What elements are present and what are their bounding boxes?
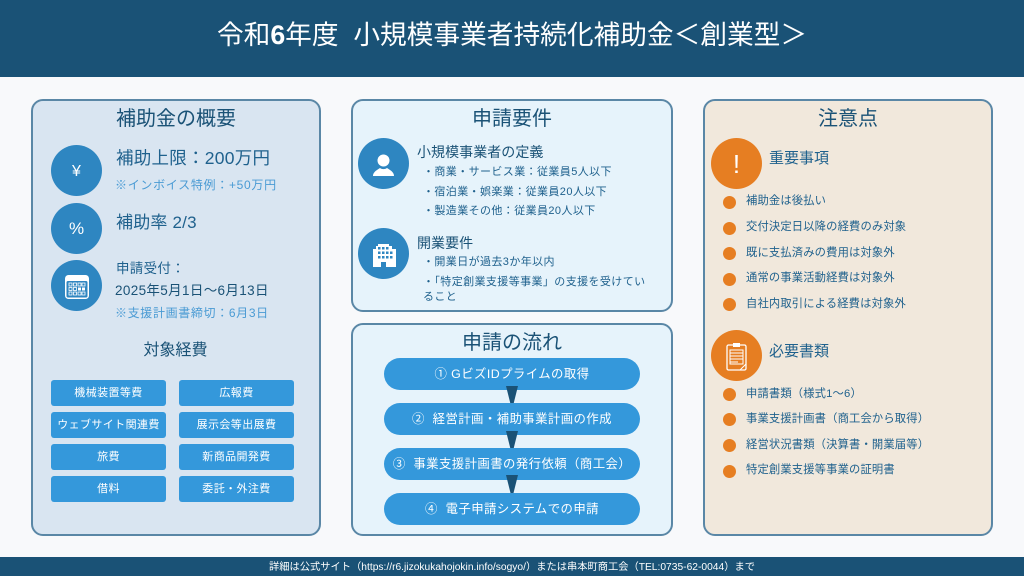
step 4: [384, 493, 640, 525]
arrow: [506, 475, 518, 493]
heading: flow: 申請の流れ: [462, 332, 562, 354]
icon: clipboard: [711, 330, 762, 381]
list item: ・宿泊業・娯楽業：従業員20人以下: [423, 186, 607, 198]
cost tag: 展示会等出展費: [197, 419, 276, 431]
icon: percent: %: [69, 218, 84, 238]
panel: cautions: [703, 99, 993, 536]
cost tag: [179, 476, 294, 502]
list item: 特定創業支援等事業の証明書: [746, 464, 895, 476]
bullet: [723, 196, 736, 209]
list item: 補助金は後払い: [746, 195, 826, 207]
bullet: [723, 222, 736, 235]
list item continuation: ること: [423, 291, 457, 303]
icon: yen: [51, 145, 102, 196]
list item: 既に支払済みの費用は対象外: [746, 247, 895, 259]
step 2: [384, 403, 640, 435]
cost tag: 広報費: [219, 387, 254, 399]
list item: 通常の事業活動経費は対象外: [746, 272, 895, 284]
cost tag: 新商品開発費: [202, 451, 271, 463]
step 2: ② 経営計画・補助事業計画の作成: [412, 412, 612, 426]
panel: application flow: [351, 323, 673, 536]
cost tag: [51, 412, 166, 438]
step 1: ① GビズIDプライムの取得: [434, 367, 590, 381]
list item: 交付決定日以降の経費のみ対象: [746, 221, 906, 233]
bullet: [723, 388, 736, 401]
list item: ・商業・サービス業：従業員5人以下: [423, 166, 612, 178]
cost tag: [179, 444, 294, 470]
step 3: [384, 448, 640, 480]
bullet: [723, 465, 736, 478]
text: opening list: [423, 256, 646, 303]
text: deadline note: ※支援計画書締切：6月3日: [115, 306, 269, 320]
panel: application requirements: [351, 99, 673, 312]
cost tag: 機械装置等費: [74, 387, 143, 399]
text: important heading: 重要事項: [769, 150, 829, 167]
text: required documents heading: 必要書類: [769, 343, 829, 360]
cost tag: [51, 476, 166, 502]
text: subsidy cap: 補助上限：200万円: [116, 148, 270, 168]
heading: cautions: 注意点: [818, 108, 878, 130]
title: 令和6年度 小規模事業者持続化補助金＜創業型＞: [217, 20, 807, 50]
footer text: 詳細は公式サイト（https://r6.jizokukahojokin.info/sogyo/）または串本町商工会（TEL:0735-62-0044）まで: [269, 562, 755, 573]
list item: 自社内取引による経費は対象外: [746, 298, 906, 310]
list item: 事業支援計画書（商工会から取得）: [746, 413, 929, 425]
list item: ・「特定創業支援等事業」の支援を受けてい: [423, 276, 646, 288]
cost tag: [51, 380, 166, 406]
footer band: [0, 557, 1024, 576]
step 3: ③ 事業支援計画書の発行依頼（商工会）: [393, 457, 631, 471]
icon: percent: [51, 202, 102, 254]
icon: calendar: [51, 260, 102, 311]
icon: exclamation: !: [733, 149, 740, 179]
list item: 経営状況書類（決算書・開業届等）: [746, 439, 929, 451]
list item: ・開業日が過去3か年以内: [423, 256, 555, 268]
list item: 申請書類（様式1～6）: [746, 388, 862, 400]
bullet: [723, 247, 736, 260]
panel: subsidy overview: [31, 99, 321, 536]
arrow: [506, 386, 518, 403]
cost tag: 委託・外注費: [202, 483, 271, 495]
grid: eligible costs: [51, 380, 294, 502]
heading: requirements: 申請要件: [472, 108, 552, 130]
text: opening requirements heading: 開業要件: [417, 234, 473, 250]
heading: overview: 補助金の概要: [116, 108, 236, 130]
list item: ・製造業その他：従業員20人以下: [423, 205, 596, 217]
text: application period label: 申請受付：: [116, 261, 185, 276]
bullet: [723, 413, 736, 426]
step 1: [384, 358, 640, 390]
text: subsidy rate: 補助率 2/3: [116, 213, 197, 232]
cost tag: [179, 412, 294, 438]
heading: eligible costs: 対象経費: [144, 342, 208, 359]
cost tag: [179, 380, 294, 406]
icon: person: [358, 138, 409, 189]
bullet: [723, 273, 736, 286]
icon: yen: ¥: [72, 163, 81, 180]
bullet: [723, 298, 736, 311]
header band: [0, 0, 1024, 77]
arrow: [506, 431, 518, 448]
cost tag: 借料: [97, 483, 120, 495]
text: application period: 2025年5月1日～6月13日: [115, 283, 269, 298]
bullet: [723, 439, 736, 452]
cost tag: ウェブサイト関連費: [57, 419, 160, 431]
text: small business definition heading: 小規模事業者の定義: [417, 144, 543, 160]
text: definition list: [423, 166, 612, 217]
icon: exclamation: [711, 138, 762, 189]
step 4: ④ 電子申請システムでの申請: [425, 502, 599, 516]
cost tag: 旅費: [97, 451, 120, 463]
icon: building: [358, 228, 409, 279]
cost tag: [51, 444, 166, 470]
text: invoice note: ※インボイス特例：+50万円: [115, 178, 277, 192]
